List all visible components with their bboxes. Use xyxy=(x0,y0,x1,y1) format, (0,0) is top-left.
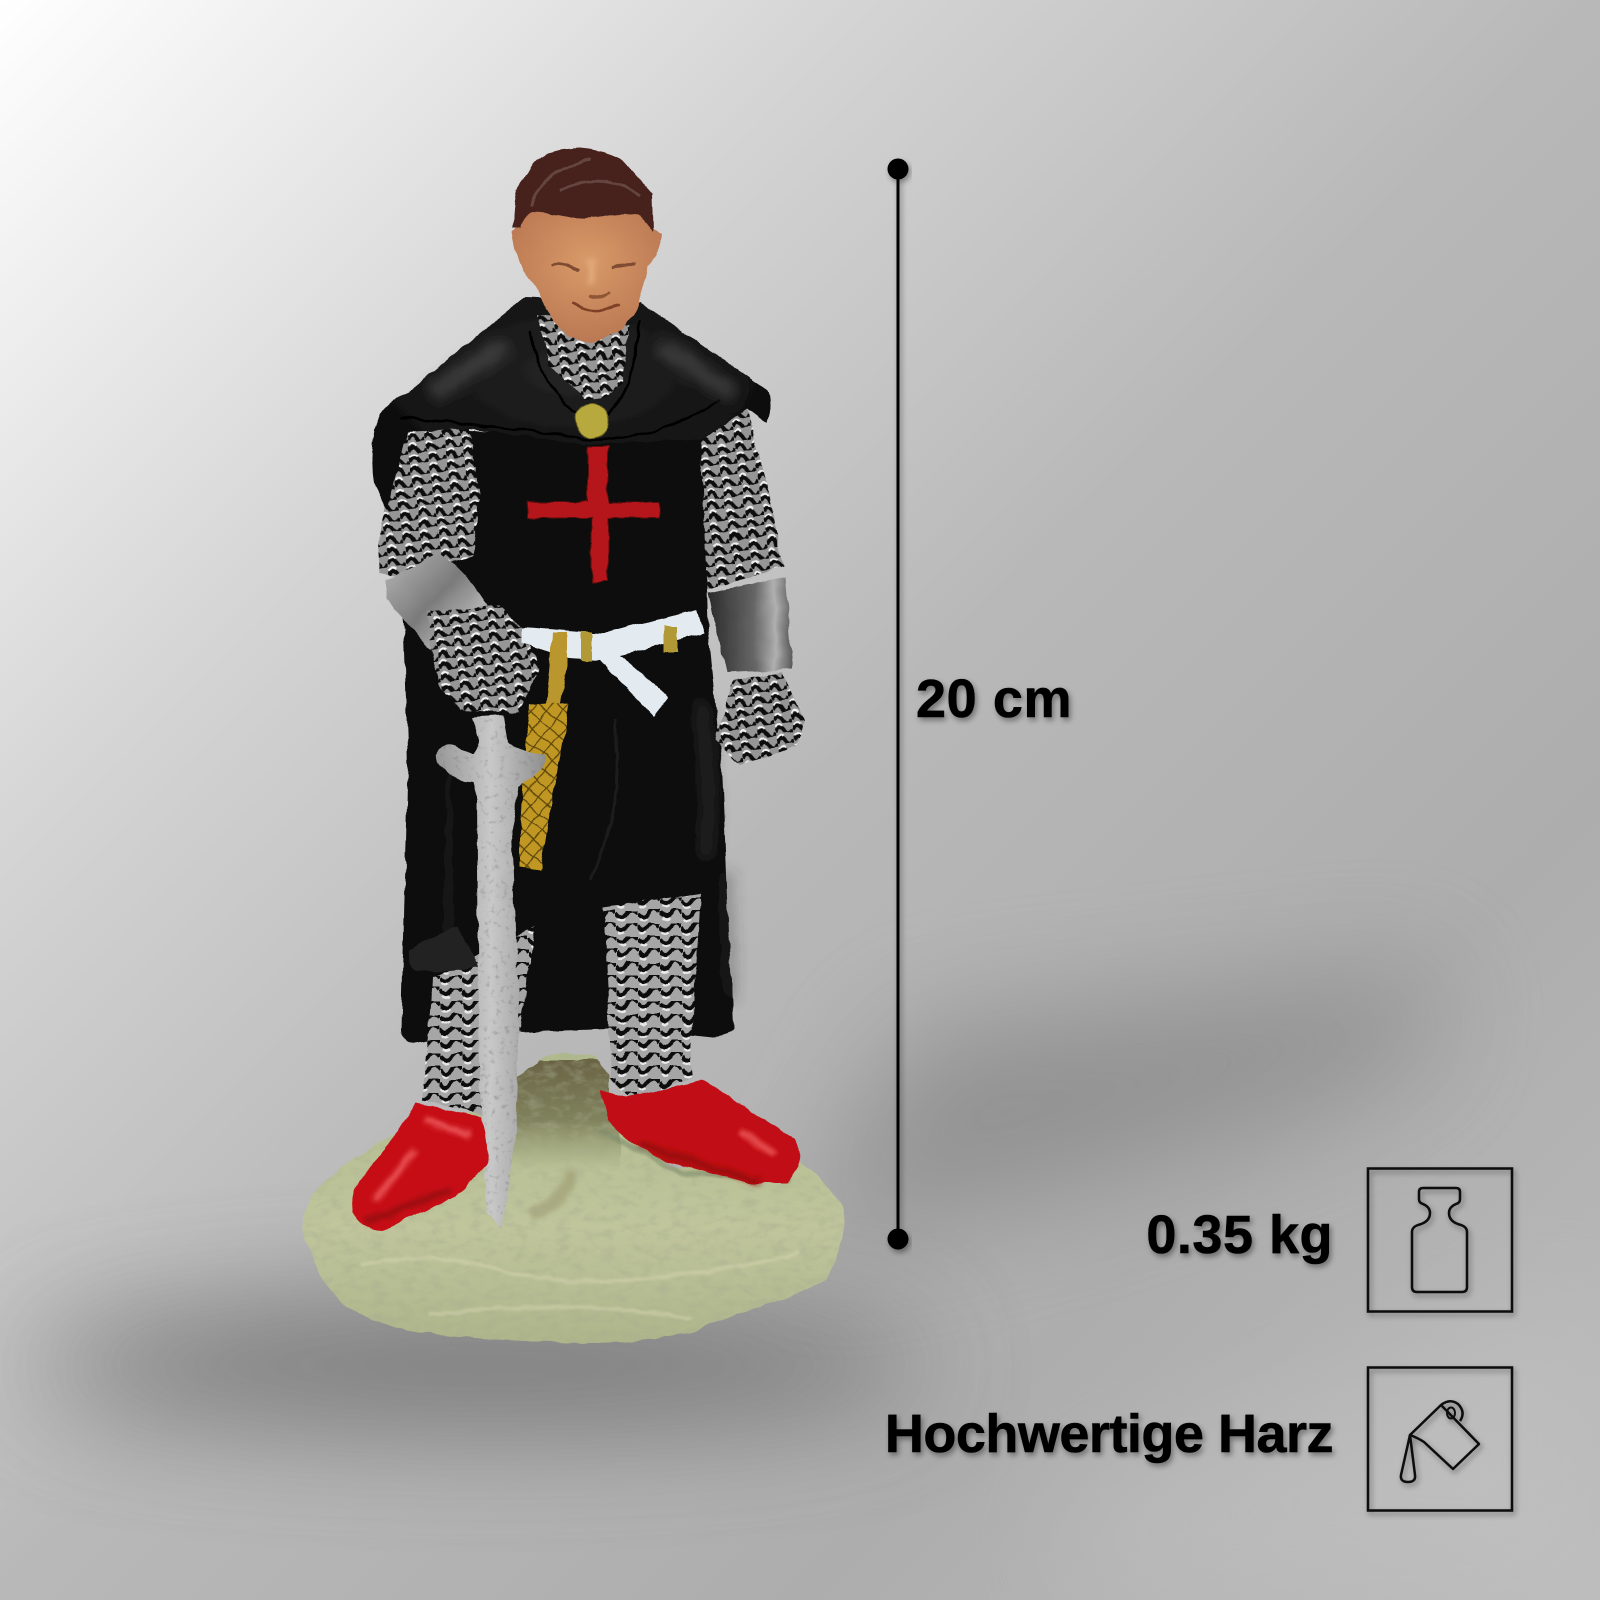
head xyxy=(512,148,662,342)
right arm chainmail xyxy=(700,407,783,590)
right vambrace xyxy=(708,577,792,673)
tunic xyxy=(409,432,722,972)
grass base xyxy=(303,1053,847,1343)
cape lower xyxy=(387,430,733,1044)
weight icon box xyxy=(1368,1168,1512,1312)
sword xyxy=(430,710,550,1230)
left leg mail xyxy=(422,923,536,1120)
mail collar xyxy=(537,315,630,400)
gold medallion xyxy=(575,404,609,438)
material label: Hochwertige Harz xyxy=(885,1404,1333,1464)
weight label: 0.35 kg xyxy=(1146,1205,1333,1265)
right leg mail xyxy=(604,893,701,1100)
cape folds xyxy=(450,760,730,1000)
dagger scabbard xyxy=(520,633,570,870)
material icon box xyxy=(1368,1368,1512,1510)
red shoes xyxy=(352,1080,800,1230)
knight figurine xyxy=(303,148,847,1343)
left gauntlet hand xyxy=(428,605,540,713)
height dimension line xyxy=(888,158,908,1250)
right fist xyxy=(715,673,804,765)
height label: 20 cm xyxy=(916,669,1072,729)
left vambrace xyxy=(387,553,490,660)
cape shoulders xyxy=(371,297,770,510)
left arm chainmail xyxy=(378,423,480,580)
red cross xyxy=(528,447,659,582)
belt xyxy=(522,610,704,717)
